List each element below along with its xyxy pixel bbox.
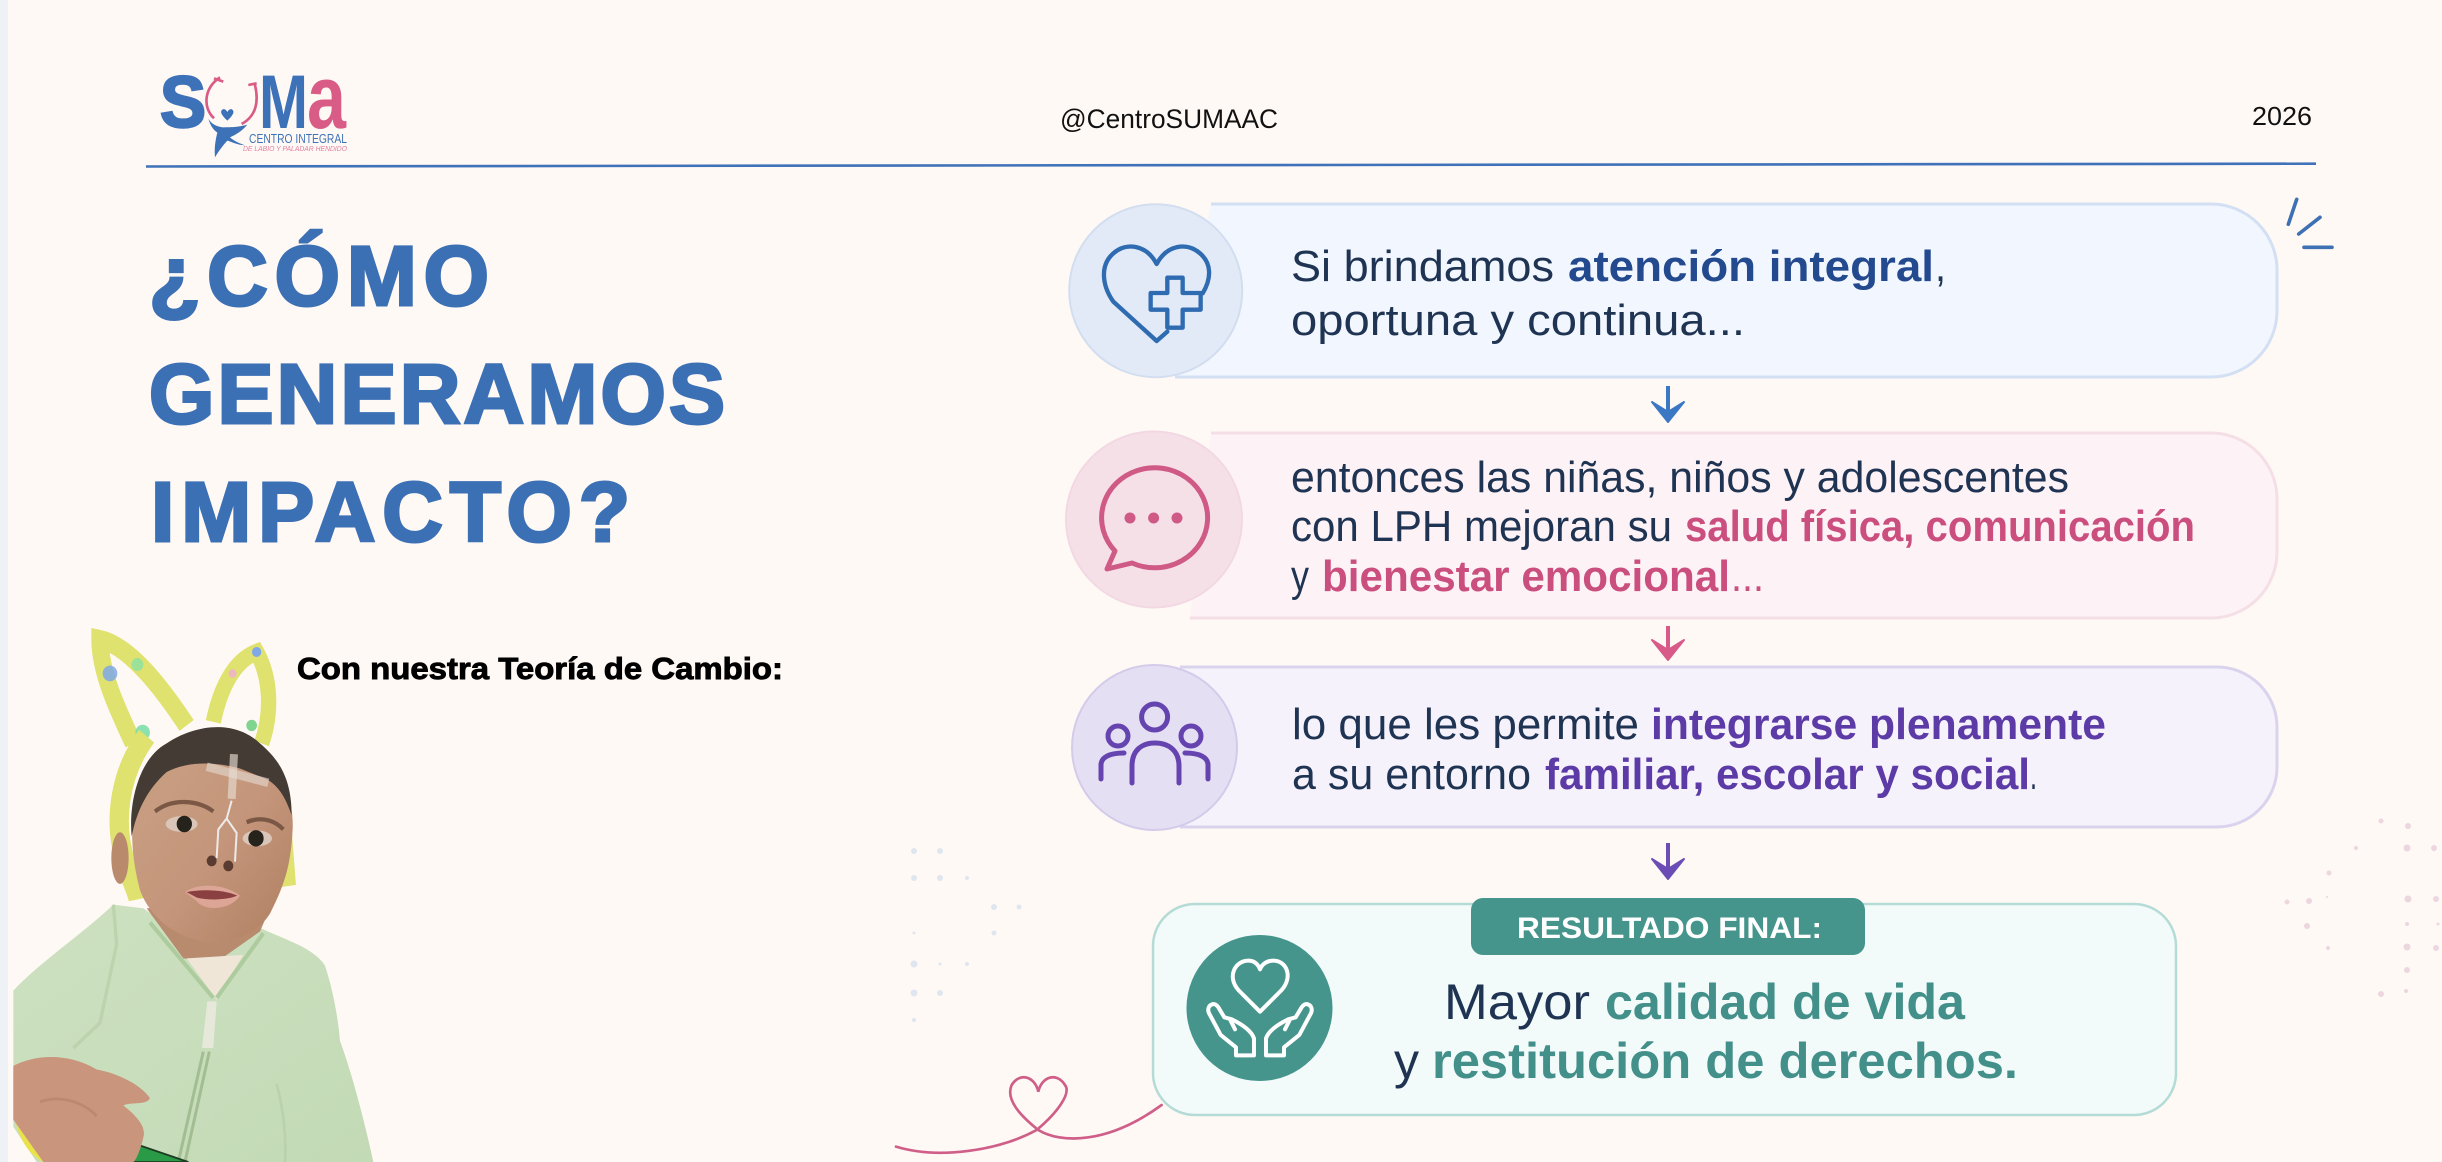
arrow: pink xyxy=(1652,626,1684,660)
icon: three people xyxy=(1072,665,1237,830)
text: salud xyxy=(1291,453,2195,601)
decorative dots right xyxy=(2284,818,2440,997)
text: integrarse: a su entorno xyxy=(1292,750,1531,799)
logo: SUMA centro integral: M xyxy=(259,60,308,145)
panel: resultado final xyxy=(1153,898,2176,1115)
text: salud: y xyxy=(1291,552,1309,601)
text: resultado final: restitución de derechos. xyxy=(1432,1033,2018,1089)
text: atención integral xyxy=(1291,242,1946,345)
text: resultado final xyxy=(1394,974,2018,1089)
logo: SUMA centro integral: a xyxy=(307,48,347,148)
arrow: blue xyxy=(1652,386,1684,422)
logo: SUMA centro integral xyxy=(160,48,347,157)
text: salud: con LPH mejoran su xyxy=(1291,502,1672,551)
logo: SUMA centro integral: CENTRO INTEGRAL xyxy=(249,131,347,146)
text: resultado final: y xyxy=(1394,1033,1419,1089)
year: 2026 xyxy=(2252,101,2312,131)
text: integrarse: lo que les permite xyxy=(1292,700,1639,749)
title: ¿CÓMO xyxy=(149,229,489,323)
text: atención integral: oportuna y continua... xyxy=(1291,296,1745,345)
title: IMPACTO? xyxy=(151,465,630,559)
heart line decoration xyxy=(896,1077,1162,1153)
text: atención integral: atención integral xyxy=(1568,242,1934,291)
badge: resultado final xyxy=(1471,898,1865,955)
arrow: purple xyxy=(1652,843,1684,879)
icon: heart with plus xyxy=(1069,204,1242,377)
text: salud: entonces las niñas, niños y adolescentes xyxy=(1291,453,2069,502)
text: integrarse: familiar, escolar y social xyxy=(1545,750,2030,799)
text: atención integral: Si brindamos xyxy=(1291,242,1554,291)
text: integrarse: integrarse plenamente xyxy=(1651,700,2106,749)
text: salud: bienestar emocional xyxy=(1322,552,1730,601)
panel: atención integral xyxy=(1069,204,2277,377)
icon: sparkle lines xyxy=(2288,199,2332,247)
title xyxy=(149,229,725,559)
text: atención integral: , xyxy=(1935,242,1946,291)
text: salud: salud física, comunicación xyxy=(1685,502,2195,551)
icon: speech bubble xyxy=(1066,432,1242,608)
header rule xyxy=(146,164,2316,166)
text: integrarse: . xyxy=(2030,750,2037,799)
title: GENERAMOS xyxy=(149,347,725,441)
photo: child with bunny ears xyxy=(13,639,373,1162)
decorative dots left xyxy=(910,848,1022,1022)
logo: SUMA centro integral: S xyxy=(160,63,206,143)
text: integrarse xyxy=(1292,700,2106,799)
badge: resultado final: RESULTADO FINAL: xyxy=(1517,912,1822,945)
text: resultado final: calidad de vida xyxy=(1605,974,1966,1030)
text: resultado final: Mayor xyxy=(1444,974,1590,1030)
subtitle: Con nuestra Teoría de Cambio: xyxy=(297,651,783,686)
social handle: @CentroSUMAAC xyxy=(1060,104,1278,134)
logo: SUMA centro integral: DE LABIO Y PALADAR HENDIDO xyxy=(243,144,347,153)
panel: salud xyxy=(1066,432,2277,618)
icon: hands holding heart xyxy=(1186,935,1332,1081)
panel: integrarse xyxy=(1072,665,2277,830)
text: salud: ... xyxy=(1731,552,1764,601)
